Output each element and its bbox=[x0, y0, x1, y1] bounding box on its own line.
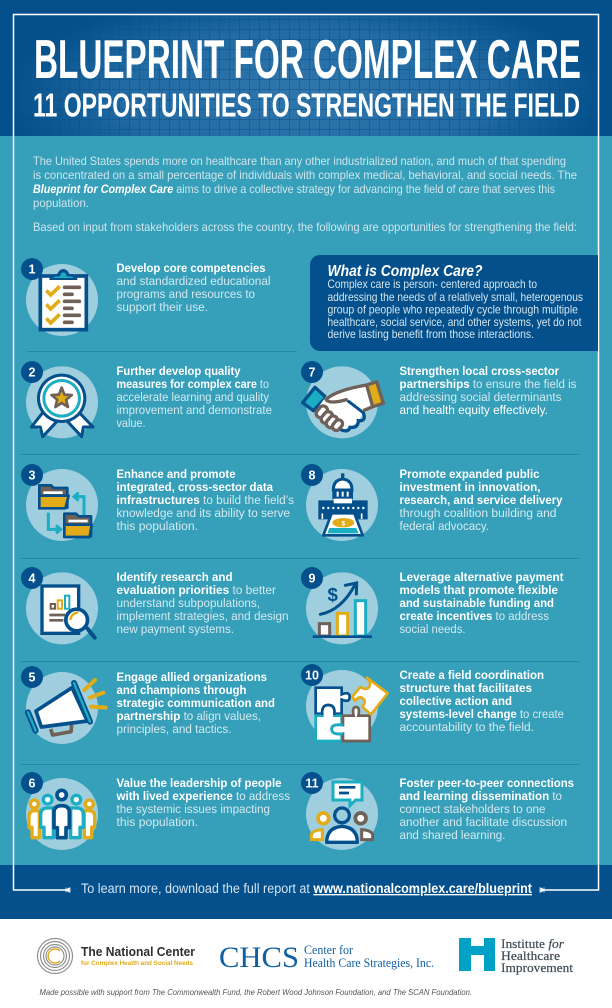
icon: rising bar chart: $ bbox=[327, 584, 338, 605]
main teal panel bbox=[0, 136, 612, 865]
text: opportunity 9: Leverage alternative payment bbox=[400, 570, 564, 584]
text: opportunity 6: Value the leadership of people bbox=[116, 776, 282, 790]
text: opportunity 4: understand subpopulations, bbox=[116, 596, 260, 610]
text: opportunity 5 bbox=[116, 670, 275, 736]
text: opportunity 11 bbox=[400, 776, 574, 842]
logo: institute for healthcare improvement: Improvement bbox=[501, 961, 574, 975]
text: opportunity 4: evaluation priorities to better bbox=[116, 583, 276, 597]
logo: CHCS: CHCS bbox=[219, 941, 299, 974]
text: opportunity 9: and sustainable funding and bbox=[400, 596, 554, 610]
callout: what is complex care bbox=[310, 255, 598, 351]
icon: award ribbon bbox=[26, 366, 98, 438]
text: opportunity 10: Create a field coordination bbox=[400, 668, 544, 682]
intro text: population. bbox=[33, 197, 89, 210]
text: opportunity 9 bbox=[400, 570, 564, 636]
logo: the national center bbox=[38, 938, 195, 974]
number badges: 6 bbox=[29, 776, 36, 790]
text: opportunity 9: social needs. bbox=[400, 622, 466, 636]
text: opportunity 8: through coalition building and bbox=[400, 506, 557, 520]
logo: CHCS: Center for bbox=[304, 943, 354, 957]
text: opportunity 2: measures for complex care to bbox=[116, 377, 269, 391]
icon: report and magnifier bbox=[26, 572, 98, 644]
text: opportunity 5: partnership to align values, bbox=[116, 709, 261, 723]
text: opportunity 8: research, and service delivery bbox=[400, 493, 563, 507]
text: opportunity 9: models that promote flexible bbox=[400, 583, 558, 597]
number badges: 10 bbox=[305, 668, 319, 682]
header band bbox=[0, 0, 612, 136]
logo: CHCS bbox=[219, 941, 434, 974]
logo: institute for healthcare improvement: Healthcare bbox=[501, 949, 560, 963]
text: opportunity 1: programs and resources to bbox=[116, 287, 255, 301]
text: opportunity 10: accountability to the field. bbox=[400, 720, 534, 734]
text: opportunity 11: connect stakeholders to one bbox=[400, 802, 546, 816]
logo: institute for healthcare improvement: Institute for bbox=[501, 937, 564, 951]
text: opportunity 3: infrastructures to build the field’s bbox=[116, 493, 294, 507]
icon: capitol building bbox=[306, 469, 378, 541]
text: opportunity 4: new payment systems. bbox=[116, 622, 234, 636]
text: opportunity 8: investment in innovation, bbox=[400, 480, 540, 494]
text: opportunity 5: strategic communication and bbox=[116, 696, 275, 710]
text: opportunity 7: Strengthen local cross-sector bbox=[400, 364, 559, 378]
text: opportunity 8: Promote expanded public bbox=[400, 467, 540, 481]
text: opportunity 2: accelerate learning and quality bbox=[116, 390, 270, 404]
intro text bbox=[33, 155, 577, 234]
icon: capitol building: $ bbox=[341, 520, 345, 527]
icon: puzzle pieces bbox=[306, 670, 388, 742]
text: opportunity 11: and learning dissemination to bbox=[400, 789, 562, 803]
text: opportunity 7: partnerships to ensure the field is bbox=[400, 377, 576, 391]
text: opportunity 1: support their use. bbox=[116, 300, 208, 314]
text: opportunity 1: and standardized educational bbox=[116, 274, 270, 288]
logo: the national center: The National Center bbox=[81, 945, 195, 959]
text: opportunity 10: collective action and bbox=[400, 694, 512, 708]
number badges: 2 bbox=[29, 366, 36, 380]
text: opportunity 11: Foster peer-to-peer connections bbox=[400, 776, 574, 790]
text: opportunity 5: principles, and tactics. bbox=[116, 722, 232, 736]
number badges: 5 bbox=[29, 670, 36, 684]
text: opportunity 7: addressing social determinants bbox=[400, 390, 562, 404]
text: opportunity 10 bbox=[400, 668, 564, 734]
text: opportunity 3: integrated, cross-sector data bbox=[116, 480, 273, 494]
logo: CHCS: Health Care Strategies, Inc. bbox=[304, 956, 434, 970]
funders credit: Made possible with support from The Commonwealth Fund, the Robert Wood Johnson Foundation, and The SCAN Foundation. bbox=[40, 987, 472, 997]
text: opportunity 8 bbox=[400, 467, 563, 533]
text: opportunity 7 bbox=[400, 364, 576, 417]
text: opportunity 11: and shared learning. bbox=[400, 828, 506, 842]
text: opportunity 1: Develop core competencies bbox=[116, 261, 266, 275]
callout: what is complex care: group of people who repeatedly cycle through multiple bbox=[328, 304, 578, 316]
text: opportunity 3: Enhance and promote bbox=[116, 467, 236, 481]
intro text: Blueprint for Complex Care aims to drive a collective strategy for advancing the field of care that serves this bbox=[33, 183, 555, 196]
intro text: The United States spends more on healthcare than any other industrialized nation, and much of that spending bbox=[33, 155, 566, 168]
icon: rising bar chart bbox=[306, 572, 378, 644]
text: opportunity 10: systems-level change to create bbox=[400, 707, 564, 721]
text: opportunity 6: this population. bbox=[116, 815, 198, 829]
text: opportunity 11: another and facilitate discussion bbox=[400, 815, 567, 829]
callout: what is complex care: What is Complex Care? bbox=[328, 263, 483, 280]
text: opportunity 4: implement strategies, and design bbox=[116, 609, 289, 623]
logo: the national center: for Complex Health and Social Needs bbox=[81, 960, 193, 967]
text: opportunity 3 bbox=[116, 467, 294, 533]
text: opportunity 7: and health equity effectively. bbox=[400, 403, 548, 417]
icon: group of people bbox=[26, 778, 98, 850]
text: opportunity 6 bbox=[116, 776, 290, 829]
text: opportunity 3: this population. bbox=[116, 519, 198, 533]
number badges: 4 bbox=[29, 572, 36, 586]
text: opportunity 5: Engage allied organizations bbox=[116, 670, 267, 684]
footer call-to-action band bbox=[0, 865, 612, 919]
text: opportunity 10: structure that facilitates bbox=[400, 681, 532, 695]
number badges bbox=[21, 258, 323, 794]
text: opportunity 3: knowledge and its ability to serve bbox=[116, 506, 290, 520]
number badges: 9 bbox=[309, 572, 316, 586]
text: opportunity 5: and champions through bbox=[116, 683, 246, 697]
logo: institute for healthcare improvement bbox=[459, 937, 574, 975]
text: opportunity 2: value. bbox=[116, 416, 146, 430]
callout: what is complex care: healthcare, social service, and other systems, yet do not bbox=[328, 316, 582, 329]
number badges: 8 bbox=[309, 468, 316, 482]
callout: what is complex care: Complex care is person- centered approach to bbox=[328, 278, 537, 291]
number badges: 3 bbox=[29, 468, 36, 482]
text: opportunity 9: create incentives to address bbox=[400, 609, 549, 623]
callout: what is complex care: derive lasting benefit from those interactions. bbox=[328, 328, 534, 341]
text: opportunity 6: the systemic issues impacting bbox=[116, 802, 270, 816]
header grid pattern bbox=[14, 15, 598, 136]
number badges: 7 bbox=[309, 366, 316, 380]
text: opportunity 4 bbox=[116, 570, 289, 636]
intro text: is concentrated on a small percentage of individuals with complex medical, behavioral, and social needs. The bbox=[33, 169, 577, 182]
icon: people in discussion bbox=[306, 778, 378, 850]
icon: folders exchange bbox=[26, 469, 98, 541]
icon: handshake bbox=[303, 366, 383, 438]
number badges: 1 bbox=[29, 262, 36, 276]
number badges: 11 bbox=[305, 776, 319, 790]
call to action: To learn more, download the full report at www.nationalcomplex.care/blueprint bbox=[81, 881, 532, 896]
text: opportunity 4: Identify research and bbox=[116, 570, 232, 584]
text: opportunity 2: Further develop quality bbox=[116, 364, 241, 378]
text: opportunity 1 bbox=[116, 261, 270, 314]
text: opportunity 2 bbox=[116, 364, 272, 430]
icon: clipboard checklist bbox=[26, 264, 98, 336]
text: opportunity 8: federal advocacy. bbox=[400, 519, 489, 533]
text: opportunity 2: improvement and demonstrate bbox=[116, 403, 272, 417]
text: opportunity 6: with lived experience to address bbox=[116, 789, 290, 803]
callout: what is complex care: addressing the needs of a relatively small, heterogenous bbox=[328, 291, 583, 304]
dividers bbox=[21, 352, 579, 764]
intro text: Based on input from stakeholders across the country, the following are opportunities for strengthening the field: bbox=[33, 221, 577, 234]
icon: megaphone bbox=[26, 672, 106, 744]
